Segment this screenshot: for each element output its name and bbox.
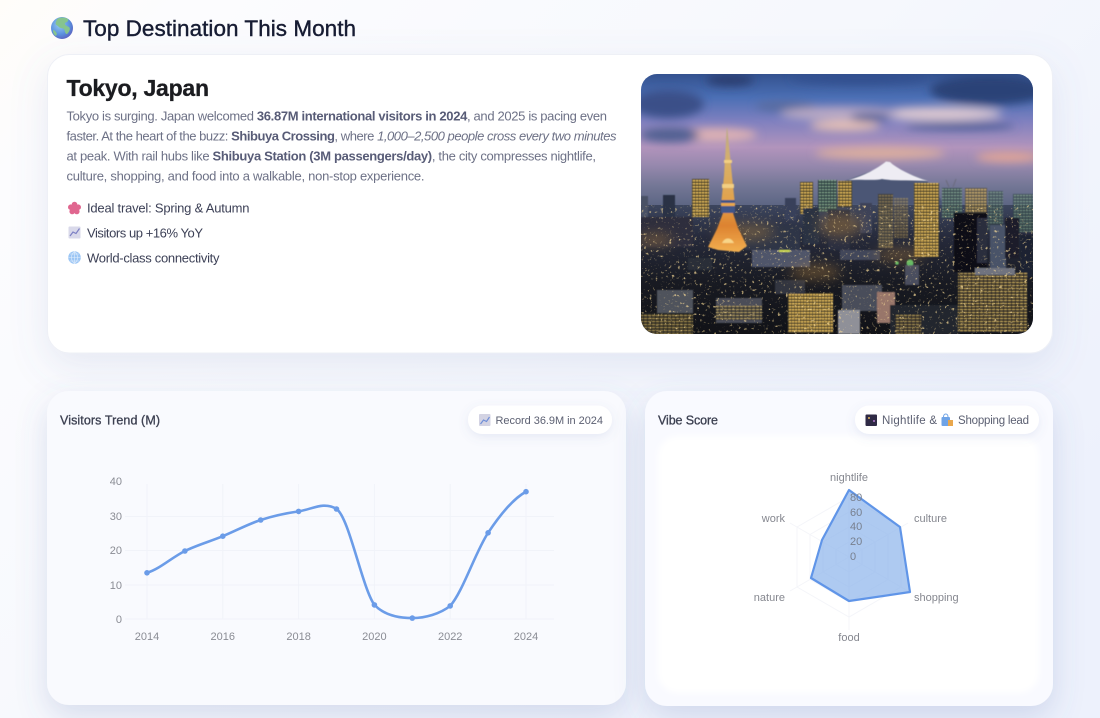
icon: globe xyxy=(51,17,73,39)
category labels: nature xyxy=(754,592,785,604)
chart heading: Visitors Trend (M) xyxy=(60,414,160,428)
x axis labels: 2016 xyxy=(211,631,235,643)
city lights xyxy=(641,205,1033,334)
list item: ideal travel: Ideal travel: Spring & Autumn xyxy=(87,200,250,216)
panel: visitors trend xyxy=(47,391,626,705)
mountain snow cap xyxy=(848,162,928,181)
panel: vibe score xyxy=(645,391,1053,706)
y axis labels xyxy=(110,476,122,626)
trend line xyxy=(147,492,526,618)
data points xyxy=(144,489,529,621)
section heading xyxy=(51,16,356,41)
description paragraph: culture, shopping, and food into a walkable, non-stop experience. xyxy=(66,168,424,184)
y axis labels: 20 xyxy=(110,545,122,557)
description paragraph xyxy=(66,108,617,184)
x axis labels: 2022 xyxy=(438,631,462,643)
y axis labels: 10 xyxy=(110,580,122,592)
x axis labels: 2014 xyxy=(135,631,159,643)
photo: Tokyo skyline with Tokyo Tower and Mt. Fuji xyxy=(632,72,1050,334)
callout: record visitors: Record 36.9M in 2024 xyxy=(496,415,603,427)
category labels: work xyxy=(761,513,785,525)
x axis labels: 2018 xyxy=(286,631,311,643)
title: Top Destination This Month xyxy=(83,16,356,41)
radial axis labels: 40 xyxy=(850,521,862,533)
description paragraph: Tokyo is surging. Japan welcomed 36.87M international visitors in 2024, and 2025 is pacing even xyxy=(66,108,607,124)
category labels: culture xyxy=(914,513,947,525)
panel: Tokyo destination card xyxy=(48,54,1052,353)
radial axis labels: 60 xyxy=(850,507,862,519)
radial axis labels xyxy=(850,492,862,563)
list item: connectivity: World-class connectivity xyxy=(87,250,220,266)
category labels: shopping xyxy=(914,592,959,604)
radar area xyxy=(811,490,910,601)
y axis labels: 30 xyxy=(110,511,122,523)
destination name: Tokyo, Japan xyxy=(66,75,209,101)
category labels: nightlife xyxy=(830,472,868,484)
description paragraph: at peak. With rail hubs like Shibuya Station (3M passengers/day), the city compresses nightlife, xyxy=(66,148,596,164)
y axis labels: 40 xyxy=(110,476,122,488)
callout: record visitors xyxy=(468,406,612,434)
warm glow of the city xyxy=(637,213,925,279)
chart heading: Vibe Score xyxy=(658,414,718,428)
radial axis labels: 20 xyxy=(850,536,862,548)
radial axis labels: 80 xyxy=(850,492,862,504)
callout: nightlife and shopping lead xyxy=(855,406,1039,434)
mountain body xyxy=(837,171,942,205)
category labels: food xyxy=(838,632,860,644)
radar chart: vibe scores xyxy=(754,472,959,644)
callout: nightlife and shopping lead: Nightlife & xyxy=(882,415,937,427)
list item: visitors up: Visitors up +16% YoY xyxy=(87,226,203,240)
icon: Tokyo Tower xyxy=(708,128,747,252)
x axis labels: 2024 xyxy=(514,631,538,643)
description paragraph: faster. At the heart of the buzz: Shibuya Crossing, where 1,000–2,500 people cross every two minutes xyxy=(66,128,617,144)
callout: nightlife and shopping lead: Shopping lead xyxy=(958,415,1029,427)
x axis labels xyxy=(135,631,538,643)
line chart: visitors 2014–2024 xyxy=(110,476,554,643)
y axis labels: 0 xyxy=(116,614,122,626)
radial axis labels: 0 xyxy=(850,551,856,563)
category labels xyxy=(754,472,959,644)
x axis labels: 2020 xyxy=(362,631,387,643)
